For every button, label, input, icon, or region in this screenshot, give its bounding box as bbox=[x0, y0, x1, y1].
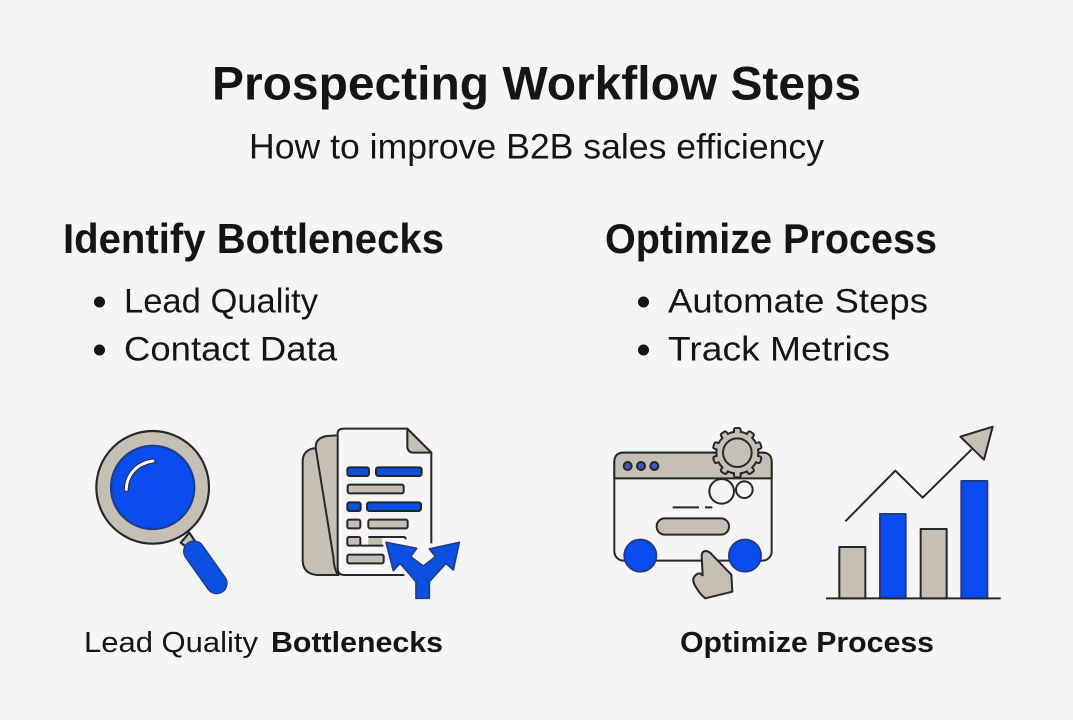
bullet list: bottlenecks: Contact Data bbox=[124, 330, 337, 368]
icon: magnifying glass bbox=[96, 431, 217, 583]
caption: optimize process: Optimize Process bbox=[680, 627, 934, 659]
bullet list: optimize bbox=[638, 282, 928, 368]
subtitle: How to improve B2B sales efficiency bbox=[249, 128, 825, 166]
heading: identify bottlenecks: Identify Bottlenecks bbox=[63, 215, 444, 262]
icon: document with fork arrow bbox=[303, 429, 459, 598]
title: Prospecting Workflow Steps bbox=[212, 58, 861, 110]
heading: optimize process: Optimize Process bbox=[605, 215, 937, 262]
caption: lead quality: Lead Quality bbox=[84, 627, 259, 659]
bullet list: optimize: Automate Steps bbox=[668, 282, 928, 320]
bullet list: bottlenecks bbox=[94, 282, 337, 368]
gear bbox=[713, 428, 762, 477]
bullet list: bottlenecks: Lead Quality bbox=[124, 282, 318, 320]
icon: browser window with gear and pointer bbox=[614, 428, 772, 598]
panel: identify bottlenecks bbox=[63, 215, 444, 368]
panel: optimize process bbox=[605, 215, 937, 368]
bullet list: optimize: Track Metrics bbox=[668, 330, 890, 368]
caption: bottlenecks: Bottlenecks bbox=[271, 627, 443, 659]
chart: rising bars with trend arrow bbox=[826, 427, 1001, 598]
